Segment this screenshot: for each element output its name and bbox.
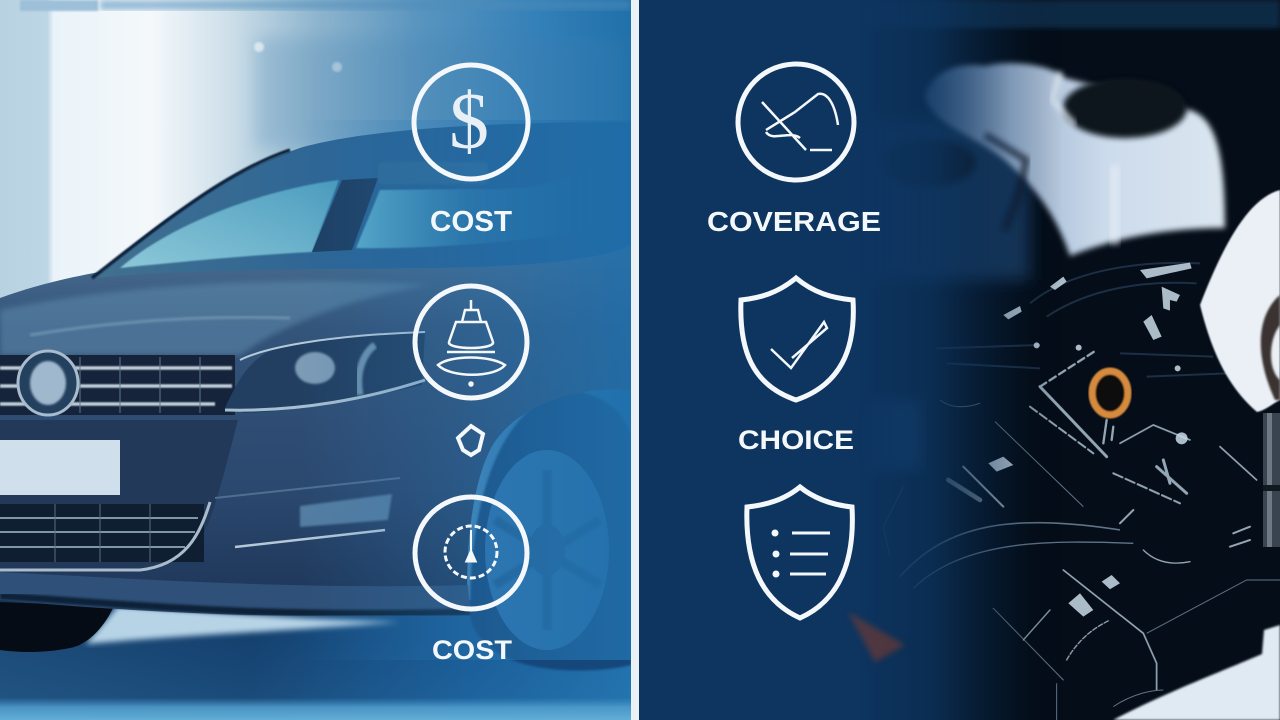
label: cost top: COST bbox=[430, 206, 512, 238]
window pillar bbox=[312, 178, 378, 252]
engine details bbox=[883, 263, 1280, 720]
dipstick bbox=[1263, 413, 1280, 547]
icon: gauge bbox=[415, 497, 527, 609]
car body bbox=[0, 122, 631, 611]
icon: cake bbox=[415, 286, 527, 398]
bumper chrome edge bbox=[0, 502, 210, 570]
rear wheel and tyre bbox=[470, 390, 631, 670]
roof and door band bbox=[95, 122, 631, 278]
fog lamp bbox=[300, 494, 392, 527]
blue tint overlay bbox=[300, 120, 631, 660]
glove bbox=[1200, 190, 1280, 412]
icon: coverage circle bbox=[738, 64, 854, 180]
mirror band bbox=[378, 162, 488, 184]
label: cost bottom: COST bbox=[432, 635, 513, 665]
bright flecks bbox=[988, 263, 1192, 617]
icon: small badge bbox=[458, 426, 483, 455]
label: choice: CHOICE bbox=[738, 425, 854, 455]
windshield bbox=[120, 180, 339, 268]
panel: car bbox=[0, 0, 631, 720]
white traces bbox=[948, 350, 1257, 690]
lower lip bbox=[0, 572, 470, 616]
roof edge line bbox=[92, 150, 290, 278]
bumper dark centre bbox=[0, 420, 238, 574]
label: coverage: COVERAGE bbox=[707, 206, 881, 237]
oil cap ring bbox=[1092, 371, 1128, 415]
headlight bbox=[225, 332, 425, 413]
divider bbox=[631, 0, 639, 720]
panel: engine bbox=[639, 0, 1280, 720]
license plate bbox=[0, 440, 120, 495]
dark wires bbox=[937, 263, 1227, 377]
icon: shield list bbox=[747, 487, 852, 618]
reservoir cap bbox=[925, 63, 1225, 256]
badge bbox=[18, 351, 78, 415]
front tyre bbox=[0, 596, 118, 652]
icon: dollar: $ bbox=[449, 78, 489, 166]
icon: dollar bbox=[414, 65, 528, 179]
lower grille bbox=[0, 504, 204, 562]
side window bbox=[356, 150, 610, 248]
navy fade overlay bbox=[639, 0, 1280, 720]
hoses bbox=[883, 400, 1280, 720]
hood highlight bbox=[0, 281, 430, 355]
red accent bbox=[848, 612, 905, 662]
tank and hose bbox=[880, 135, 1026, 230]
upper grille bbox=[0, 355, 235, 415]
showroom floor bbox=[0, 600, 631, 720]
icon: shield check bbox=[741, 278, 853, 400]
sleeve bbox=[1113, 625, 1280, 720]
